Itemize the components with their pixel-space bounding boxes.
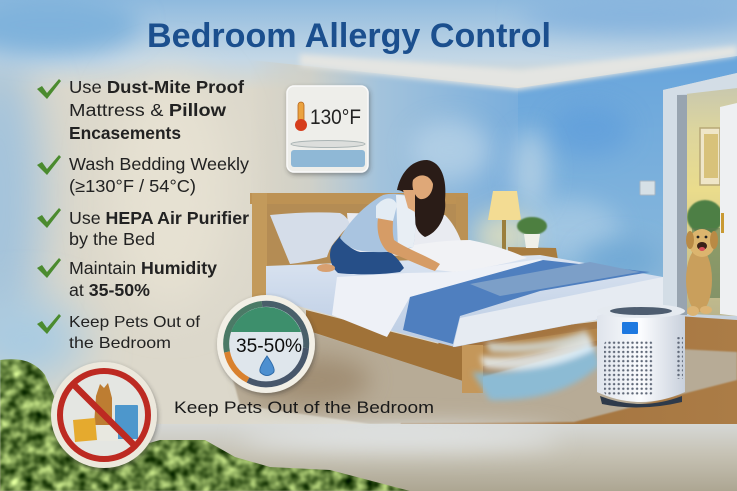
airflow swoosh: [472, 330, 600, 400]
bottom painted band: [0, 424, 737, 491]
item: air purifier: Use HEPA Air Purifier: [69, 208, 249, 228]
woman tucking pillow: [317, 160, 445, 274]
floor and carpet: [225, 305, 737, 425]
pillow being fitted: [403, 240, 527, 272]
pillows: [270, 212, 461, 264]
blue throw: [403, 260, 650, 344]
checklist: [37, 77, 249, 352]
item: wash bedding: Wash Bedding Weekly: [69, 154, 249, 174]
foliage: [0, 359, 410, 491]
item: encasements: Encasements: [69, 123, 181, 143]
item: air purifier: [37, 208, 249, 249]
temperature card: 130°F: [310, 106, 361, 129]
item: encasements: [37, 77, 244, 143]
neck: [403, 190, 415, 212]
water basin: [291, 140, 365, 167]
bedroom walls and ceiling: [250, 46, 737, 320]
caption: Keep Pets Out of the Bedroom: [174, 398, 434, 417]
foot: [317, 264, 335, 272]
humidity gauge: 35-50%: [236, 336, 302, 357]
item: encasements: Mattress & Pillow: [69, 100, 226, 120]
white sheet: [332, 259, 548, 337]
purifier body: [597, 304, 685, 408]
thermometer icon: [295, 102, 307, 131]
sleeve: [376, 198, 397, 221]
no pets sign: [51, 362, 157, 468]
humidity gauge: [217, 295, 315, 393]
hallway plant: [687, 200, 723, 298]
item: pets: the Bedroom: [69, 335, 171, 352]
framed picture: [700, 128, 720, 185]
cat and pet items: [73, 383, 138, 442]
water drop: [260, 356, 274, 376]
item: air purifier: by the Bed: [69, 229, 155, 249]
lamp: [488, 191, 521, 250]
face: [412, 175, 433, 199]
item: pets: Keep Pets Out of: [69, 314, 201, 331]
item: humidity: [37, 258, 217, 300]
item: encasements: Use Dust-Mite Proof: [69, 77, 244, 97]
light switch: [640, 181, 655, 195]
headboard: [250, 193, 468, 298]
mattress: [266, 255, 663, 347]
golden retriever: [686, 229, 718, 316]
item: wash bedding: (≥130°F / 54°C): [69, 176, 196, 196]
item: humidity: Maintain Humidity: [69, 258, 217, 278]
jeans: [330, 236, 404, 274]
item: pets: [37, 314, 201, 352]
item: wash bedding: [37, 154, 249, 196]
air purifier: [472, 304, 685, 408]
open door: [720, 103, 737, 316]
title: Bedroom Allergy Control: [147, 17, 551, 55]
item: humidity: at 35-50%: [69, 280, 150, 300]
hair: [397, 160, 445, 237]
frame: [306, 310, 600, 393]
potted plant: [517, 217, 547, 248]
door frame: [663, 73, 737, 315]
bedside table with lamp and plant: [474, 191, 558, 263]
doorway with hallway: [663, 73, 737, 320]
temperature card: [287, 86, 368, 172]
shirt: [340, 194, 415, 252]
arm: [377, 218, 440, 271]
bed: [250, 193, 663, 393]
